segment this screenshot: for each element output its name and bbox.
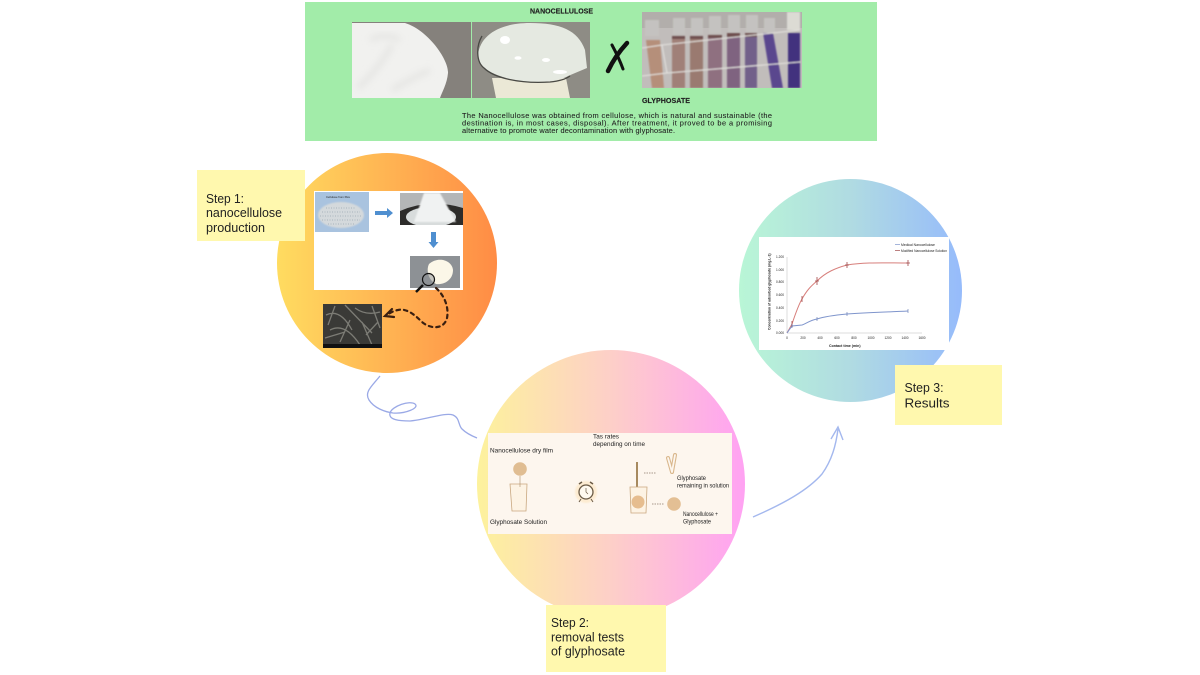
photo: glyphosate test tubes (642, 12, 802, 88)
line chart (759, 237, 949, 350)
arrows and products (644, 455, 675, 504)
note: step 3: Step 3: (904, 380, 944, 395)
x axis labels: 1400 (901, 336, 909, 340)
diagram labels: Glyphosate (683, 518, 711, 526)
legend (895, 243, 947, 253)
diagram labels: Glyphosate Solution (490, 519, 547, 526)
panel: step 3 circle (739, 179, 962, 402)
y axis labels: 0.800 (776, 280, 784, 284)
note: step 2: removal tests (551, 630, 624, 644)
text block: description: The Nanocellulose was obtained from cellulose, which is natural and sustainable (the (462, 111, 772, 120)
icon: loaded disc (667, 497, 681, 511)
icon: alarm clock (575, 481, 597, 503)
x axis labels: 0 (786, 336, 788, 340)
panel: nanocellulose and glyphosate overview (305, 2, 877, 141)
arrow: from step 2 to step 3 (753, 427, 843, 517)
diagram labels: Nanocellulose dry film (490, 448, 553, 454)
photo: cellulose raw material (315, 192, 369, 232)
x axis labels: 800 (851, 336, 857, 340)
note: step 1: production (206, 220, 265, 235)
note: step 2: Step 2: (551, 615, 589, 630)
line chart: Concentration of adsorbed glyphosate (mg.L-1) (768, 254, 772, 330)
photo: nanocellulose film (352, 22, 471, 98)
text block: description: alternative to promote water decontamination with glyphosate. (462, 126, 675, 135)
diagram labels: remaining in solution (677, 482, 729, 490)
arrow: dashed path to micrograph (385, 288, 448, 327)
arrow: right (375, 208, 393, 218)
photo: nanocellulose in funnel (400, 193, 463, 227)
note: step 1 (197, 170, 305, 241)
y axis labels: 0.200 (776, 319, 784, 323)
photo: nanocellulose suspension in beaker (472, 22, 590, 98)
icon: sample tubes (668, 455, 675, 472)
y axis labels: 0.400 (776, 306, 784, 310)
diagram labels: Nanocellulose + (683, 511, 718, 518)
diagram labels: Glyphosate (677, 475, 706, 482)
x axis labels: 1000 (867, 336, 875, 340)
x axis labels: 400 (817, 336, 823, 340)
diagram card (488, 433, 732, 534)
y axis labels: 1.200 (776, 255, 784, 259)
x axis labels: 200 (800, 336, 806, 340)
x axis labels: 1200 (884, 336, 892, 340)
text block: description (462, 111, 772, 135)
y axis labels (776, 255, 784, 335)
note: step 1: nanocellulose (206, 205, 282, 220)
note: step 2 (546, 605, 666, 672)
y axis labels: 0.000 (776, 331, 784, 335)
icon: cross symbol (608, 43, 627, 71)
icon: nanocellulose disc (513, 462, 527, 476)
series: modified nanocellulose (787, 263, 908, 333)
panel: step 1 circle (277, 153, 497, 373)
connector: curly line from step 2 to step 1 (367, 376, 477, 438)
x axis labels: 1600 (918, 336, 926, 340)
photo: dried film (410, 256, 460, 288)
heading: glyphosate: GLYPHOSATE (642, 98, 690, 105)
photo: electron micrograph (323, 304, 382, 348)
text block: description: destination is, in most cases, disposal). After treatment, it proved to be a promising (462, 118, 772, 128)
icon: pipette and beaker with disc (630, 462, 647, 513)
data markers (792, 260, 910, 327)
note: step 3: Results (904, 396, 950, 410)
photo: cellulose raw material: Cellulose from fibre (326, 195, 351, 199)
note: step 2: of glyphosate (551, 644, 625, 658)
icon: beaker with solution (510, 476, 527, 511)
legend: Modified Nanocellulose Solution (901, 249, 947, 253)
diagram labels (490, 434, 729, 526)
x axis labels: 600 (834, 336, 840, 340)
icon: magnifier (416, 274, 434, 292)
legend: Medical Nanocellulose (901, 243, 935, 247)
process diagram white card (314, 191, 463, 290)
diagram labels: depending on time (593, 441, 645, 448)
x axis labels (786, 336, 926, 340)
y axis labels: 1.000 (776, 268, 784, 272)
axis titles: Contact time (min) (829, 344, 861, 348)
diagram labels: Tas rates (593, 434, 620, 440)
panel: step 2 circle (477, 350, 745, 618)
arrow: down (428, 232, 438, 248)
heading: nanocellulose: NANOCELLULOSE (530, 8, 593, 16)
series: unmodified nanocellulose (787, 311, 908, 333)
note: step 3 (895, 365, 1002, 425)
y axis labels: 0.600 (776, 293, 784, 297)
note: step 1: Step 1: (206, 191, 244, 206)
